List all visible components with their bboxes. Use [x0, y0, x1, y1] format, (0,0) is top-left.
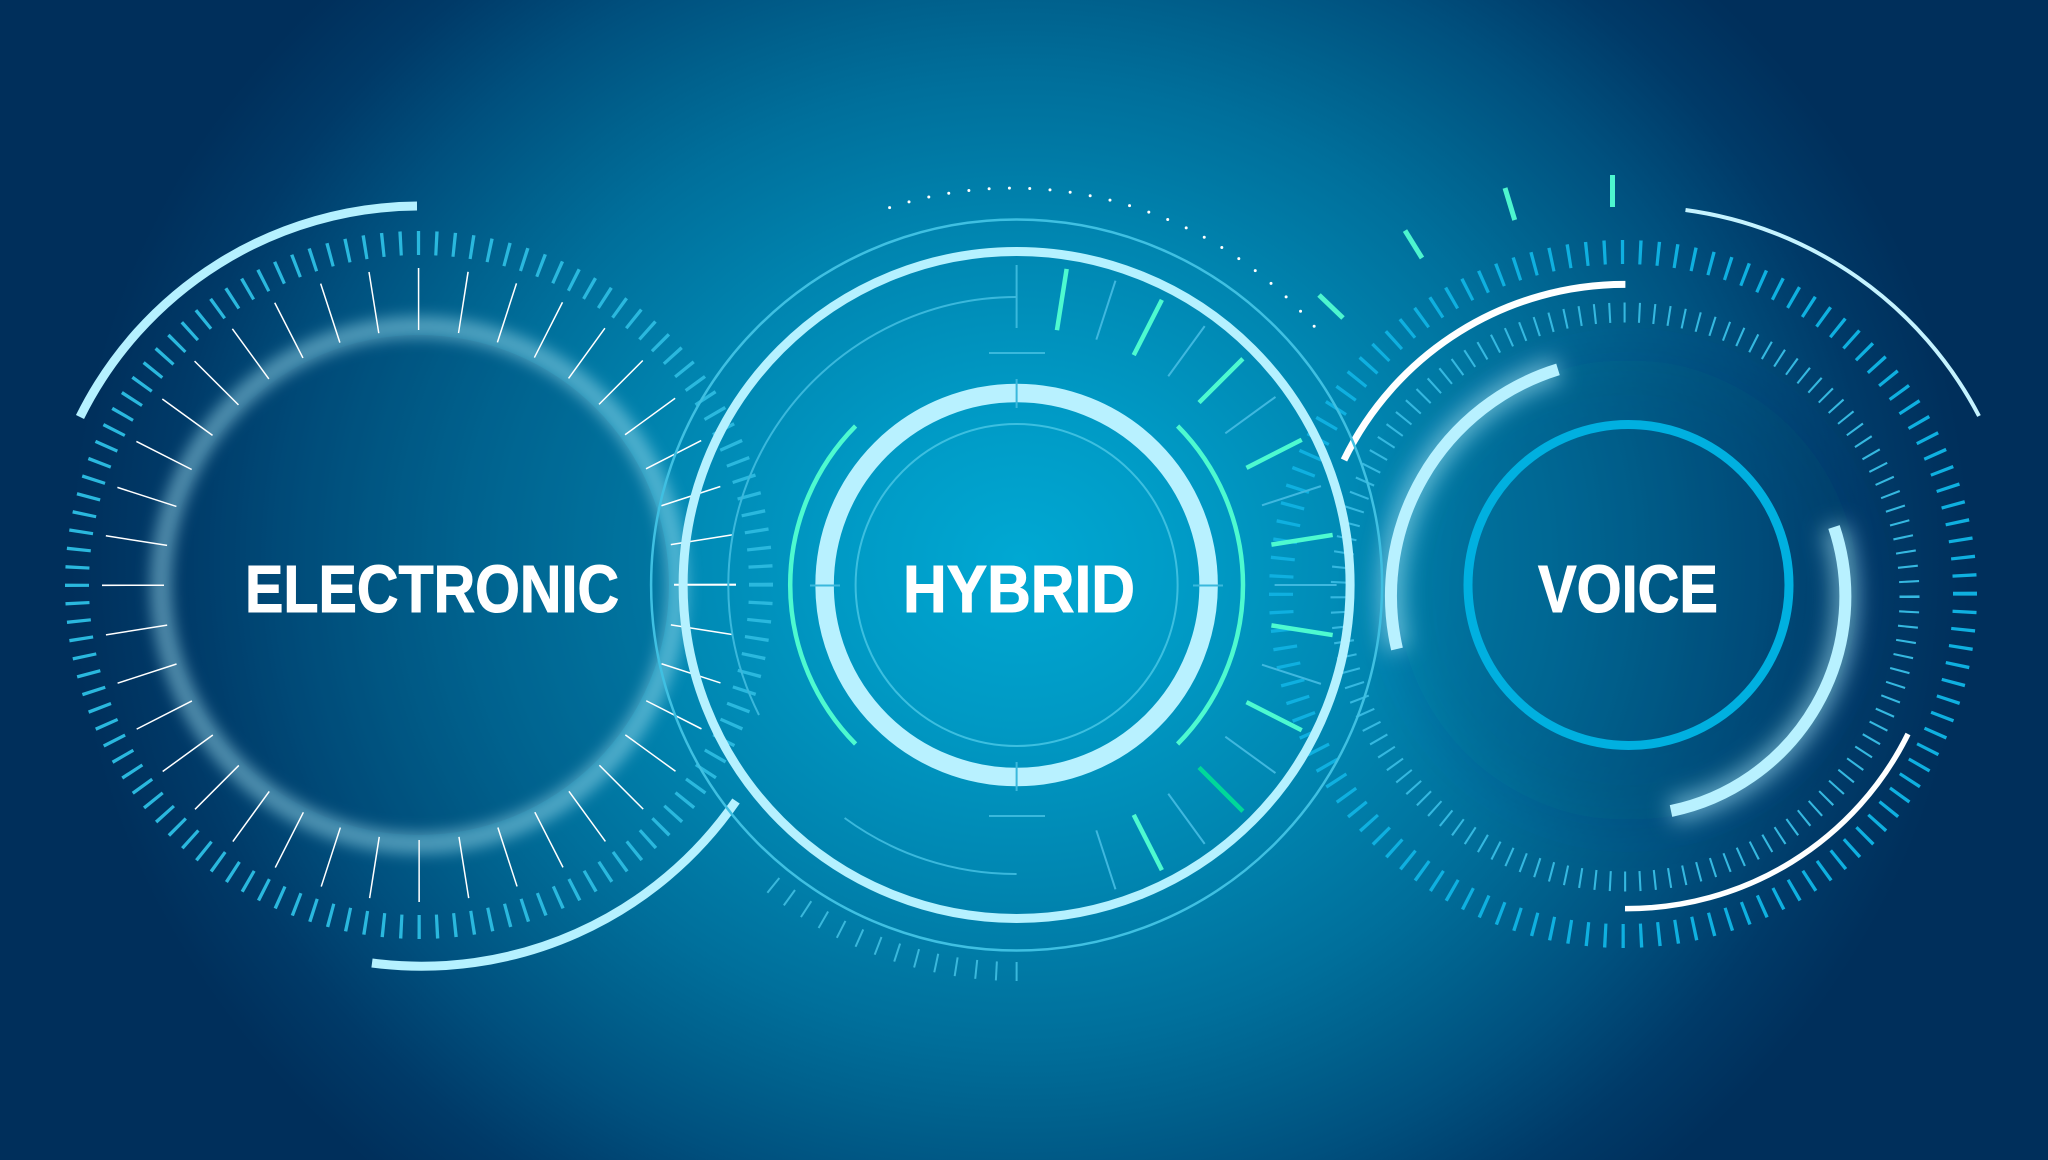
white tick ring: [133, 299, 705, 871]
main bright ring: [683, 252, 1350, 918]
crosshair ticks: [810, 265, 1223, 816]
label: electronic: ELECTRONIC: [245, 552, 619, 627]
bright arc right: [1671, 527, 1845, 811]
inner thin ring: [856, 424, 1178, 746]
white arc lower: [1625, 734, 1908, 909]
outer cyan tick ring: [77, 243, 761, 927]
green radial ticks: [1057, 269, 1333, 870]
panel: electronic dial: [77, 206, 761, 966]
center ring: [1468, 424, 1789, 746]
blue radial ticks: [1096, 281, 1337, 889]
green side arcs: [790, 426, 1243, 744]
white arc upper: [1344, 284, 1625, 460]
label: voice: VOICE: [1538, 552, 1718, 627]
panel: voice dial: [1281, 175, 1979, 936]
interior shade: [169, 335, 669, 835]
bright arc left: [1391, 369, 1558, 649]
outer thin ring: [651, 220, 1382, 950]
lower bright arc: [372, 801, 736, 966]
inner tick ring: [1340, 312, 1910, 882]
thin upper-right arc: [1686, 210, 1979, 416]
panel: hybrid dial: [651, 188, 1382, 981]
inner thick ring: [825, 393, 1209, 777]
green ticks: [1319, 175, 1612, 318]
glow ring: [161, 327, 677, 843]
outer tick ring: [1281, 252, 1965, 936]
label: hybrid: HYBRID: [903, 552, 1135, 627]
interior shade: [1398, 360, 1858, 820]
dotted arc: [890, 188, 1327, 342]
glow arcs: [1391, 369, 1845, 811]
upper bright arc: [80, 206, 417, 417]
bottom tick fan: [767, 878, 1017, 981]
blue quarter arcs: [728, 297, 1017, 874]
